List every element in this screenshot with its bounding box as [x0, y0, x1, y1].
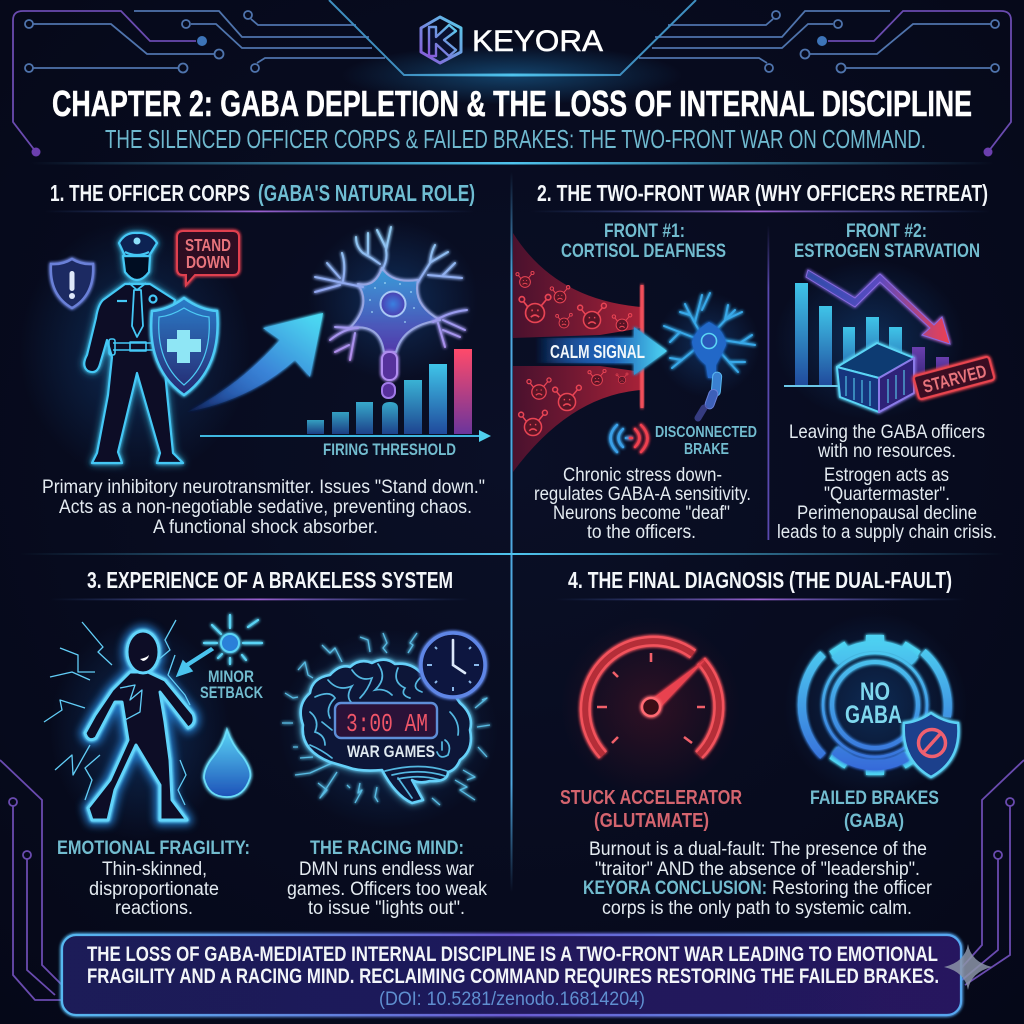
- label: stuck accelerator: [560, 787, 742, 832]
- lightning sparks: [282, 633, 490, 805]
- text block: racing mind: [287, 837, 487, 919]
- text block: emotional fragility: [57, 837, 250, 919]
- icon: gear no gaba: GABA: [845, 701, 902, 729]
- text block: cortisol deafness: to the officers.: [587, 521, 696, 543]
- heading 1: (GABA'S NATURAL ROLE): [258, 180, 475, 206]
- icon: neuron: [308, 220, 478, 398]
- bottom circuit right: [955, 760, 1024, 985]
- icon: gauge: [561, 617, 741, 797]
- front 1 heading: CORTISOL DEAFNESS: [561, 240, 726, 262]
- text block: emotional fragility: Thin-skinned,: [102, 858, 207, 880]
- label: firing threshold: FIRING THRESHOLD: [323, 440, 456, 459]
- heading 3: 3. EXPERIENCE OF A BRAKELESS SYSTEM: [87, 567, 453, 593]
- icon: stand down speech bubble: [177, 231, 239, 285]
- panel: the officer corps: [20, 180, 491, 538]
- heading 1: 1. THE OFFICER CORPS: [50, 180, 250, 206]
- icon: gear no gaba: NO: [860, 678, 890, 706]
- logo header plate: [329, 0, 696, 105]
- text block: emotional fragility: disproportionate: [89, 878, 219, 900]
- label: minor setback: SETBACK: [200, 683, 264, 702]
- header circuit right: [639, 11, 1011, 156]
- arrow: decline: [806, 270, 950, 344]
- arrow: calm signal: [535, 327, 667, 375]
- label: minor setback: MINOR: [208, 667, 254, 686]
- icon: brain: WAR GAMES: [347, 742, 435, 761]
- front 2 heading: [794, 220, 980, 262]
- header circuit left: [13, 11, 385, 156]
- text block: estrogen starvation: leads to a supply chain crisis.: [777, 521, 997, 543]
- illustration: cortisol funnel: [513, 233, 644, 472]
- text block: cortisol deafness: [534, 464, 751, 543]
- text block: conclusion: KEYORA CONCLUSION:: [583, 877, 767, 899]
- icon: clock: [421, 633, 485, 697]
- label: minor setback: [200, 667, 264, 702]
- front 1 heading: [561, 220, 726, 262]
- icon: officer figure: [84, 233, 183, 463]
- icon: brain: 3:00 AM: [346, 709, 428, 739]
- icon: fragile figure: [44, 620, 230, 840]
- text block: conclusion: "traitor" AND the absence of "leadership".: [595, 858, 920, 880]
- label: disconnected brake: [655, 424, 757, 458]
- text block: emotional fragility: reactions.: [115, 897, 193, 919]
- text block: cortisol deafness: regulates GABA-A sensitivity.: [534, 483, 751, 505]
- front divider: [768, 225, 769, 540]
- text block: estrogen starvation: [777, 421, 997, 543]
- front 1 heading: FRONT #1:: [604, 220, 685, 242]
- text block: estrogen starvation: with no resources.: [817, 440, 956, 462]
- label: stuck accelerator: STUCK ACCELERATOR: [560, 787, 742, 809]
- icon: gear no gaba: [783, 613, 967, 797]
- label: failed brakes: (GABA): [844, 810, 904, 832]
- icon: supply crate: [837, 343, 914, 412]
- text block: racing mind: to issue "lights out".: [308, 897, 465, 919]
- icon: cortisol molecules: [516, 271, 632, 436]
- icon: warning shield: [51, 259, 93, 308]
- quadrant divider horizontal: [20, 553, 1004, 555]
- icon: blocked shield: [904, 713, 958, 777]
- bar chart: firing threshold: [200, 349, 491, 459]
- stamp: starved: STARVED: [921, 361, 989, 397]
- brand name: KEYORA: [472, 25, 603, 58]
- arrow: setback to figure: [177, 648, 213, 676]
- icon: minor setback sun: [204, 615, 262, 664]
- callout: summary bar: (DOI: 10.5281/zenodo.16814204): [379, 989, 645, 1010]
- callout: summary bar: [62, 935, 961, 1015]
- text block: racing mind: games. Officers too weak: [287, 878, 487, 900]
- front 2 heading: ESTROGEN STARVATION: [794, 240, 980, 262]
- text block: racing mind: DMN runs endless war: [299, 858, 474, 880]
- icon: sparkle: [944, 944, 992, 990]
- text block: conclusion: corps is the only path to systemic calm.: [602, 897, 912, 919]
- icon: brain: [278, 630, 498, 830]
- bottom circuit left: [0, 760, 62, 1000]
- label: disconnected brake: DISCONNECTED: [655, 424, 757, 441]
- text block: estrogen starvation: Perimenopausal decline: [797, 502, 977, 524]
- text block: estrogen starvation: "Quartermaster".: [824, 483, 950, 505]
- text block: estrogen starvation: Estrogen acts as: [824, 464, 949, 486]
- chart: estrogen decline: [775, 260, 965, 420]
- text block: conclusion: Burnout is a dual-fault: The presence of the: [589, 838, 927, 860]
- lightning cracks: [44, 620, 190, 805]
- text block: GABA role: A functional shock absorber.: [153, 516, 378, 538]
- front 2 heading: FRONT #2:: [846, 220, 927, 242]
- icon: stand down speech bubble: STAND: [185, 235, 231, 255]
- icon: disconnected brake: [610, 425, 648, 452]
- icon: medical shield: [151, 298, 218, 395]
- text block: conclusion: Restoring the officer: [772, 877, 932, 899]
- icon: water drop: [204, 730, 250, 797]
- text block: emotional fragility: EMOTIONAL FRAGILITY:: [57, 837, 250, 859]
- text block: cortisol deafness: Neurons become "deaf": [553, 502, 730, 524]
- text block: GABA role: [42, 476, 485, 538]
- icon: stand down speech bubble: DOWN: [186, 252, 230, 272]
- label: failed brakes: FAILED BRAKES: [810, 787, 939, 809]
- text block: GABA role: Acts as a non-negotiable sedative, preventing chaos.: [59, 496, 472, 518]
- text block: conclusion: [583, 838, 932, 919]
- quadrant divider vertical: [510, 172, 512, 892]
- text block: GABA role: Primary inhibitory neurotransmitter. Issues "Stand down.": [42, 476, 485, 498]
- arrow: calm signal: CALM SIGNAL: [550, 342, 645, 362]
- text block: cortisol deafness: Chronic stress down-: [563, 464, 722, 486]
- label: stuck accelerator: (GLUTAMATE): [594, 810, 709, 832]
- label: failed brakes: [810, 787, 939, 832]
- panel: the two-front war: [513, 180, 997, 543]
- text block: racing mind: THE RACING MIND:: [310, 837, 464, 859]
- icon: keyora logo: [421, 17, 461, 63]
- arrow: shield to neuron: [187, 313, 323, 412]
- text block: estrogen starvation: Leaving the GABA officers: [789, 421, 985, 443]
- label: disconnected brake: BRAKE: [684, 441, 729, 458]
- header rule: [30, 162, 994, 164]
- panel: final diagnosis: [555, 567, 967, 919]
- panel: brakeless system: [44, 567, 498, 919]
- icon: deaf neuron: [656, 293, 760, 418]
- label: 3:00 AM display: [335, 703, 437, 738]
